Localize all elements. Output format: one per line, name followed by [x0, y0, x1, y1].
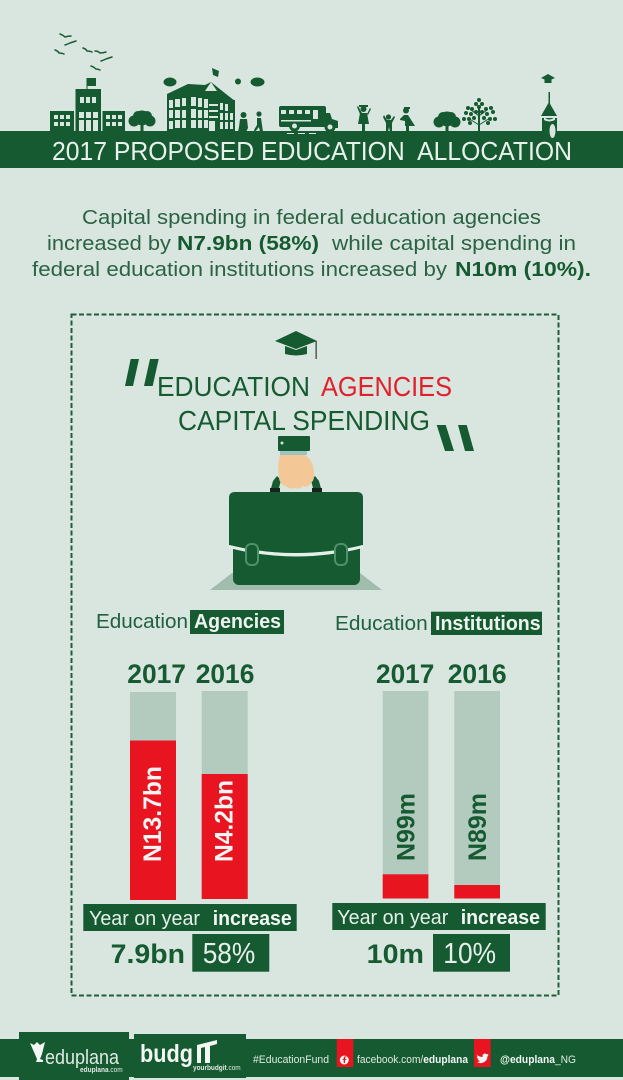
panel heading: [157, 371, 452, 436]
panel: dashed frame: [72, 314, 558, 996]
icon: leafy tree: [462, 98, 497, 133]
icon: child and parent: [383, 107, 415, 132]
label: education institutions: Institutions: [435, 613, 541, 635]
panel heading: CAPITAL SPENDING: [178, 405, 430, 436]
hashtag: #EducationFund: [253, 1054, 329, 1066]
facebook handle: facebook.com/eduplana: [357, 1054, 469, 1066]
bar: 2016 agencies: [202, 691, 248, 899]
sleeve: [278, 436, 310, 451]
bar: 2017 institutions: N99m: [392, 793, 420, 861]
stat: institutions increase: 10%: [443, 938, 496, 970]
bar: 2016 agencies: N4.2bn: [210, 780, 238, 862]
bar: 2016 institutions: N89m: [464, 793, 492, 861]
case flap: [229, 492, 363, 552]
case body: [233, 530, 360, 585]
logo: budgit: [134, 1034, 246, 1078]
logo: eduplana: eduplana.com: [80, 1065, 123, 1074]
label: education agencies: [96, 610, 284, 634]
logo: eduplana: eduplana: [45, 1047, 120, 1069]
title banner: 2017 PROPOSED EDUCATION ALLOCATION: [52, 136, 572, 166]
year on year strip: [332, 903, 546, 930]
year on year strip: increase: [213, 908, 292, 930]
icon: walking children: [238, 111, 263, 132]
icon: hand holding briefcase: [210, 436, 382, 590]
intro text: N10m (10%).: [455, 259, 591, 281]
title banner: [0, 124, 623, 168]
stat: agencies increase: 7.9bn: [111, 939, 185, 969]
label: education agencies: Agencies: [194, 611, 281, 633]
intro text: [32, 207, 591, 281]
intro text: federal education institutions increased by: [32, 259, 447, 281]
icon: flock of birds: [55, 34, 112, 70]
icon: round tree: [434, 112, 460, 133]
year on year strip: [83, 904, 297, 931]
footer band: [0, 1032, 623, 1080]
label: education agencies: Education: [96, 611, 188, 633]
case handle: [270, 476, 322, 492]
year on year strip: increase: [461, 907, 540, 929]
icon: closing quote: [437, 425, 474, 451]
intro text: N7.9bn (58%): [177, 233, 319, 255]
icon: opening quote: [125, 359, 159, 386]
year labels: [376, 659, 507, 689]
briefcase shadow: [210, 573, 382, 590]
logo: eduplana: [19, 1032, 129, 1080]
stat: institutions increase: 10m: [367, 939, 424, 969]
label: education institutions: [335, 612, 542, 635]
bar: 2016 institutions: [454, 691, 500, 898]
stat: institutions increase: [367, 934, 510, 972]
bar: 2017 agencies: N13.7bn: [139, 766, 167, 862]
icon: twitter: [474, 1039, 491, 1067]
year labels: 2017: [127, 659, 186, 689]
intro text: Capital spending in federal education agencies: [82, 207, 541, 229]
icon: school bus: [279, 106, 338, 132]
icon: tower with cap: [541, 74, 557, 133]
hand: [278, 455, 314, 489]
clasps: [246, 544, 258, 565]
logo: budgit: yourbudgit.com: [193, 1063, 241, 1072]
bar: 2017 agencies: [130, 692, 176, 900]
twitter handle: @eduplana_NG: [500, 1054, 576, 1066]
logo: budgit: budg: [140, 1040, 193, 1068]
icon: facebook: [337, 1039, 353, 1067]
icon: school house: [164, 68, 264, 132]
panel heading: EDUCATION: [157, 371, 310, 402]
icon: tree left: [128, 110, 156, 132]
year labels: 2017: [376, 659, 434, 689]
icon: graduate child: [357, 105, 371, 132]
illustration: school skyline: [50, 68, 557, 133]
stat: agencies increase: 58%: [203, 938, 255, 970]
year on year strip: Year on year: [89, 908, 200, 930]
label: education institutions: Education: [335, 613, 428, 635]
stat: agencies increase: [111, 934, 269, 972]
year labels: 2016: [196, 659, 254, 689]
section: education agencies: [83, 610, 297, 972]
icon: graduation cap: [275, 331, 317, 359]
year on year strip: Year on year: [337, 907, 449, 929]
panel heading: AGENCIES: [321, 371, 452, 402]
intro text: increased by: [47, 233, 171, 255]
intro text: while capital spending in: [331, 233, 576, 255]
year labels: [127, 659, 254, 689]
road markings: [287, 132, 316, 134]
icon: campus building: [50, 78, 125, 132]
section: education institutions: [332, 612, 546, 972]
year labels: 2016: [448, 659, 507, 689]
bar: 2017 institutions: [383, 691, 428, 898]
